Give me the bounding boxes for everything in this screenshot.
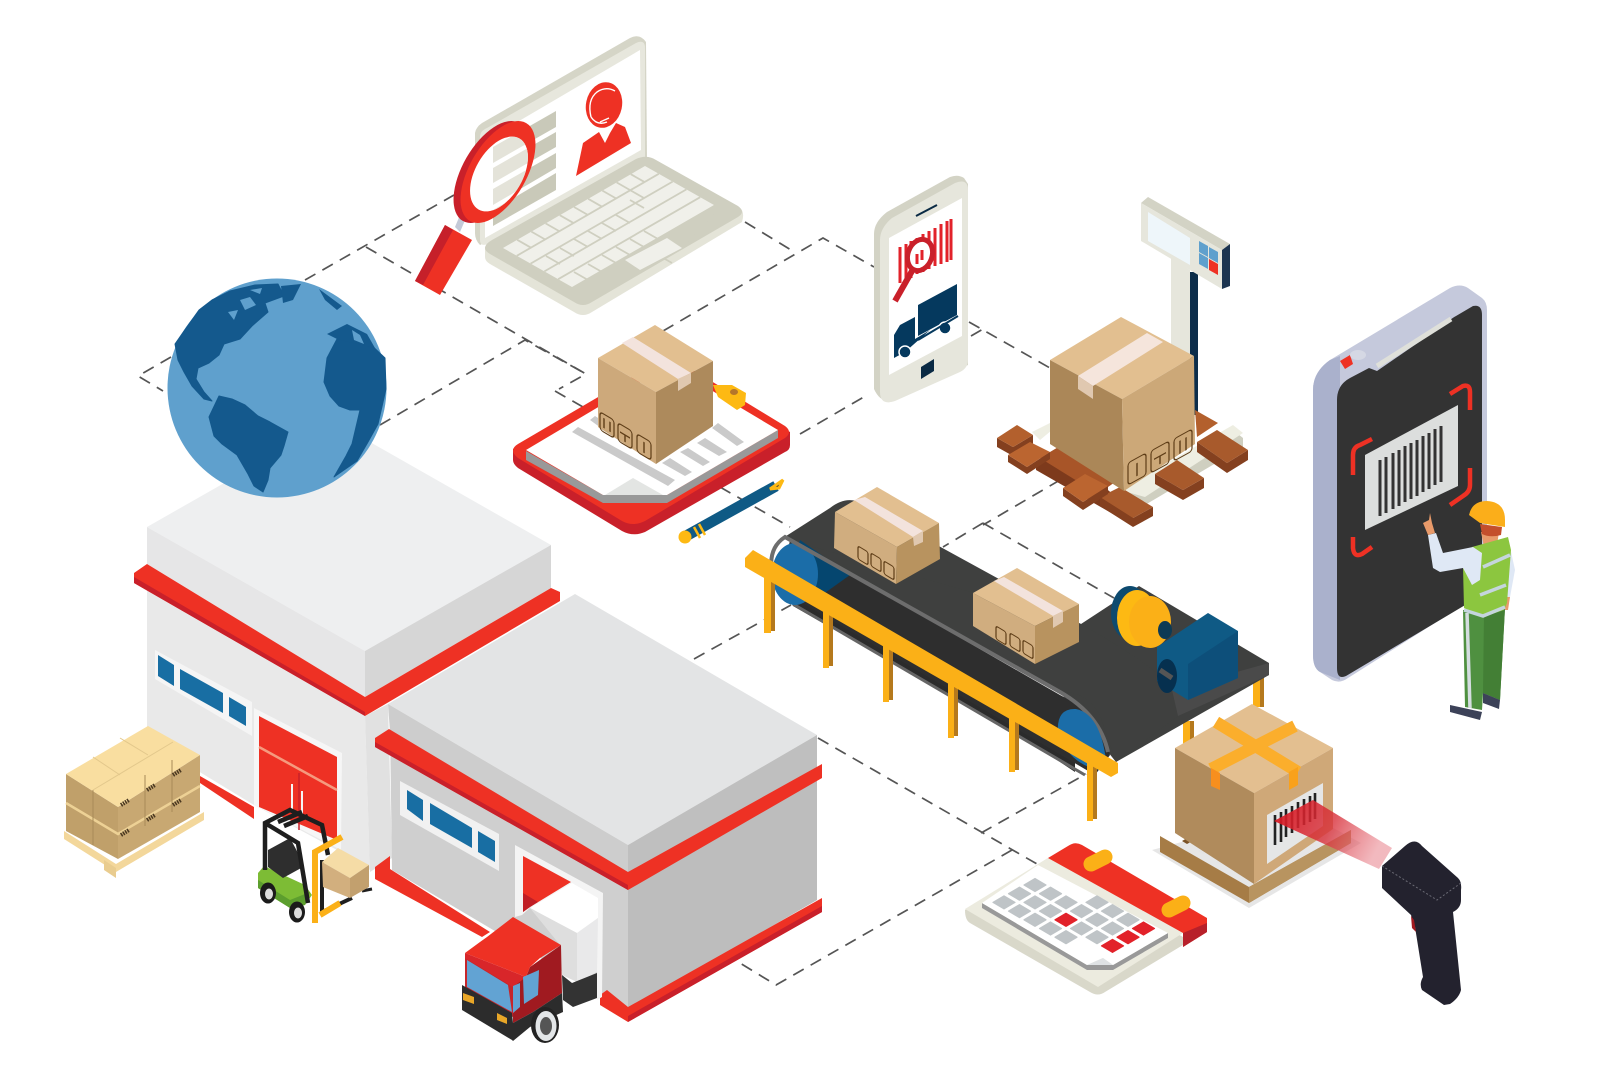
- rear wing windows: [155, 650, 252, 736]
- rear wing base strip: [200, 776, 254, 819]
- magnifier on phone: [895, 236, 937, 301]
- clip: [713, 385, 746, 410]
- forklift mast: [322, 860, 352, 912]
- back legs: [1183, 676, 1264, 745]
- main wing windows: [400, 781, 499, 871]
- parcel on belt 1: [834, 487, 940, 584]
- rear wing walls: [147, 583, 392, 872]
- main wing roof band: [375, 729, 822, 890]
- dashed connector lines: [138, 195, 1114, 985]
- worker: [1423, 501, 1515, 720]
- laser beam: [1274, 800, 1392, 869]
- forklift wheels: [260, 882, 305, 922]
- scan brackets: [1353, 386, 1470, 555]
- parcel on pallet being scanned: [1152, 704, 1461, 1005]
- rear wing door: [254, 708, 342, 850]
- cab: [462, 917, 563, 1043]
- parcel on scale: [1050, 317, 1195, 491]
- motor: [1111, 586, 1238, 700]
- belt return strip: [785, 590, 1075, 772]
- pallet: [1160, 830, 1351, 903]
- main wing base strips: [375, 856, 822, 1022]
- forklift: [258, 810, 372, 923]
- laptop base and keyboard: [485, 157, 743, 315]
- weighing scale with parcel on pallet: [997, 197, 1248, 527]
- large phone: [1313, 286, 1487, 682]
- conveyor belt: [745, 487, 1269, 821]
- forklift cage: [265, 810, 328, 903]
- carton on forks: [322, 848, 369, 898]
- smartphone with barcode and truck: [874, 176, 968, 402]
- laptop: [475, 36, 743, 315]
- clipboard with parcel: [513, 325, 790, 534]
- laptop lid: [475, 36, 647, 245]
- calendar header: [1048, 843, 1207, 947]
- calendar page: [982, 903, 1168, 970]
- main wing parapet: [388, 704, 817, 875]
- carton: [1175, 704, 1333, 884]
- barcode scanner: [1382, 842, 1461, 1005]
- parcel on belt 2: [973, 568, 1079, 664]
- belt and motor platform: [771, 500, 1269, 775]
- warehouse: [134, 421, 822, 1022]
- stacked cartons on pallet: [64, 726, 204, 878]
- red barcode: [900, 219, 951, 283]
- south america: [209, 396, 288, 492]
- delivery truck: [462, 883, 598, 1043]
- barcode card: [1365, 405, 1458, 530]
- north america: [175, 284, 284, 401]
- rear wing roof: [147, 421, 551, 651]
- calendar: [965, 843, 1207, 994]
- calendar base: [965, 858, 1183, 994]
- parcel: [598, 325, 713, 464]
- conveyor legs: [764, 562, 1097, 821]
- forklift seat: [268, 838, 303, 878]
- africa and europe: [324, 338, 386, 477]
- delivery truck icon: [894, 284, 958, 358]
- cargo box: [530, 883, 598, 1007]
- calendar date cells: [993, 878, 1154, 952]
- main wing roof: [388, 594, 817, 845]
- pallet shadow: [1152, 810, 1361, 908]
- scale display: [1141, 197, 1230, 289]
- main wing walls: [390, 725, 817, 1010]
- loading dock door: [515, 845, 603, 1000]
- shipping label with barcode: [1267, 783, 1323, 864]
- rear wing parapet: [147, 527, 551, 697]
- magnifying glass: [415, 121, 536, 295]
- pen: [678, 480, 783, 544]
- pallet: [997, 410, 1248, 527]
- conveyor side rail: [745, 550, 1118, 777]
- scale post: [1171, 258, 1198, 415]
- agent avatar on screen: [576, 79, 631, 176]
- right roller: [1058, 709, 1106, 770]
- handheld phone with scanning worker: [1313, 286, 1515, 720]
- rear wing roof band: [134, 564, 560, 716]
- forklift body: [258, 866, 312, 908]
- clipboard body: [513, 358, 790, 534]
- globe: [168, 278, 386, 498]
